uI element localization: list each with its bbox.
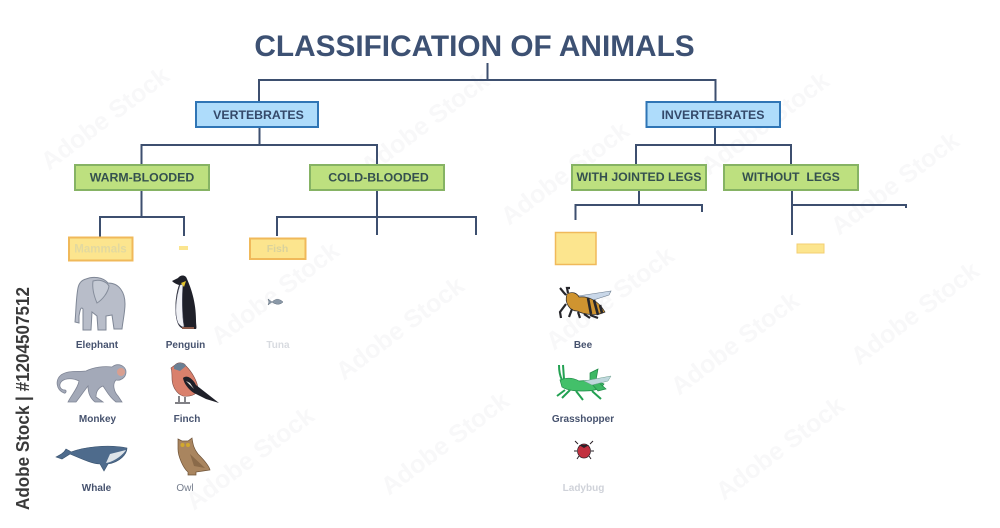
label: grasshopper: Grasshopper (552, 414, 614, 425)
text: Adobe Stock (496, 116, 635, 231)
box: with jointed legs (572, 165, 706, 190)
label: whale: Whale (82, 483, 112, 494)
box: mammals (69, 238, 132, 260)
text: Adobe Stock (541, 241, 680, 356)
box: invertebrates (646, 102, 780, 127)
text: Adobe Stock (206, 236, 345, 351)
box: cold-blooded: COLD-BLOODED (328, 170, 429, 184)
text: Adobe Stock (666, 286, 805, 401)
icon: monkey (57, 365, 126, 402)
box: mammals: Mammals (74, 244, 127, 256)
text: Adobe Stock (181, 401, 320, 516)
box: worms (blank) (797, 244, 824, 253)
icon: penguin (172, 275, 196, 329)
box: insects (blank) (556, 232, 596, 264)
label: owl: Owl (176, 483, 194, 494)
text: Adobe Stock (331, 271, 470, 386)
label: bee: Bee (574, 340, 593, 351)
text: Adobe Stock (376, 386, 515, 501)
box: warm-blooded (75, 165, 209, 190)
icon: whale (56, 446, 127, 471)
box: cold-blooded (310, 165, 444, 190)
box: birds label (faded) (179, 246, 188, 250)
icon: tuna (268, 299, 283, 305)
box: vertebrates (196, 102, 318, 127)
icon: owl (178, 438, 210, 475)
box: with jointed legs: WITH JOINTED LEGS (576, 170, 702, 184)
connector lines: tree (100, 63, 906, 237)
label: elephant: Elephant (76, 340, 119, 351)
text: Adobe Stock (846, 256, 985, 371)
text: Adobe Stock (711, 391, 850, 506)
icon: elephant (75, 277, 125, 330)
text: Adobe Stock (356, 66, 495, 181)
box: warm-blooded: WARM-BLOODED (90, 170, 194, 184)
box: invertebrates: INVERTEBRATES (662, 108, 764, 122)
box: without legs: WITHOUT LEGS (742, 170, 840, 184)
icon: ladybug (574, 441, 594, 459)
icon: bee (560, 288, 611, 318)
label: penguin: Penguin (166, 340, 205, 351)
text: Adobe Stock (826, 126, 965, 241)
box: fish (250, 238, 306, 259)
icon: finch (171, 363, 219, 403)
label: ladybug: Ladybug (563, 483, 604, 494)
icon: grasshopper (557, 365, 611, 400)
label: tuna: Tuna (266, 340, 290, 351)
label: finch: Finch (174, 414, 200, 425)
box: vertebrates: VERTEBRATES (213, 108, 304, 122)
box: fish: Fish (267, 243, 288, 255)
box: without legs (724, 165, 858, 190)
label: monkey: Monkey (79, 414, 117, 425)
text: Adobe Stock (696, 66, 835, 181)
text: Adobe Stock (36, 61, 175, 176)
title: CLASSIFICATION OF ANIMALS (254, 30, 695, 63)
watermark id: Adobe Stock | #1204507512 (12, 287, 33, 510)
